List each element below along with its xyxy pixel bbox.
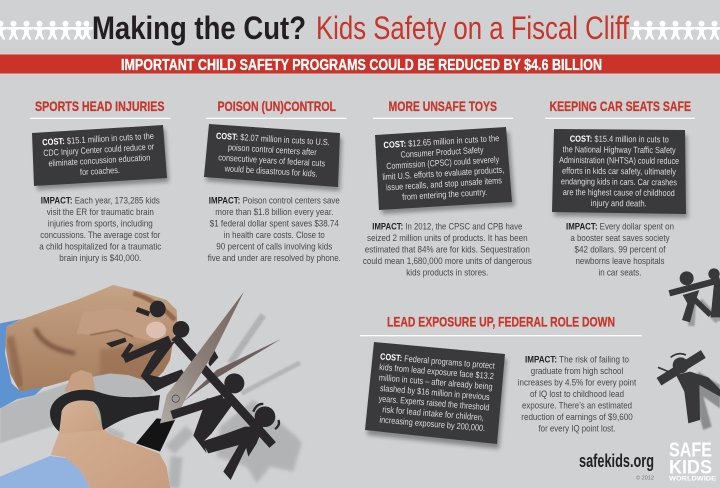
impact text: poison: $1 federal dollar spent saves $38.74 [210,218,339,228]
heading: lead exposure: LEAD EXPOSURE UP, FEDERAL ROLE DOWN [387,314,615,330]
heading: poison control: POISON (UN)CONTROL [218,98,336,114]
scissor upper handle [50,390,160,432]
cost card: lead: kids from lead exposure face $13.2 [379,362,494,381]
impact text: lead: graduate from high school [531,366,623,376]
impact text: toys: seized 2 million units of products. It has been [367,233,528,243]
paper chain left [0,21,93,40]
cost card: lead: increasing exposure by 200,000. [379,415,486,433]
cost card: poison [204,124,342,191]
blade lower [183,339,281,402]
title [92,10,629,46]
cost card: toys: limit U.S. efforts to evaluate products, [382,165,505,182]
impact text: poison: IMPACT: Poison control centers save [209,196,340,206]
impact text: car seats: in car seats. [598,268,642,278]
upper sleeve [0,319,46,408]
panel: sports head injuries [30,98,170,263]
cost card: toys: Commission (CPSC) could severely [386,154,500,171]
upper hand [5,285,177,392]
blade upper [160,292,244,423]
cost card: car seats: efforts in kids car safety, ultimately [562,166,677,177]
panel: unsafe toys [363,98,532,278]
impact text: sports: brain injury is $40,000. [59,253,141,263]
paper doll top right [669,268,720,326]
cost card: poison: poison control centers after [228,142,317,157]
lower hand [51,403,170,488]
impact text: sports: injuries from sports, including [48,218,153,228]
impact text: sports: a child hospitalized for a traumatic [39,242,162,252]
lower thumb tip [64,370,96,392]
cost card: sports: COST: $15.1 million in cuts to the [42,131,154,147]
thumb [77,308,167,342]
cost card: toys [375,127,515,214]
finger shading [100,340,173,380]
cost card: lead: COST: Federal programs to protect [380,351,496,371]
impact text: lead: of IQ lost to childhood lead [530,389,624,399]
paper chain [106,301,279,480]
handle ring insert [95,407,111,427]
impact text: toys: kids products in stores. [406,268,488,278]
cost card: sports [32,125,169,190]
impact text: poison: more than $1.8 billion every year. [215,207,333,217]
impact text: poison [208,196,341,263]
impact text: lead [518,354,637,434]
cost card: car seats: COST: $15.4 million in cuts to [570,134,669,144]
paper arm over blade [172,398,223,415]
cost card: car seats [552,129,688,218]
title: Kids Safety on a Fiscal Cliff [316,10,629,46]
impact text: toys [363,222,532,278]
cost card: poison: consecutive years of federal cuts [218,152,326,168]
cost card: car seats: the National Highway Traffic Safety [563,144,676,155]
impact text: lead: exposure. There’s an estimated [522,400,632,410]
paper doll lower right [658,354,720,430]
impact text: poison: five and under are resolved by phone. [208,253,341,263]
impact text: lead: increases by 4.5% for every point [518,378,637,388]
logo: safe kids worldwide: WORLDWIDE [669,476,716,482]
logo: safe kids worldwide [669,440,716,482]
impact text: poison: 90 percent of calls involving kids [216,242,333,252]
copyright: © 2012 [636,474,654,482]
impact text: sports: visit the ER for traumatic brain [47,207,154,217]
impact text: toys: estimated that 84% are for kids. Sequestration [365,244,530,254]
impact text: car seats: newborns leave hospitals [576,256,665,266]
heading: unsafe toys: MORE UNSAFE TOYS [388,98,497,114]
impact text: poison: in health care costs. Close to [224,230,325,240]
pivot screw [172,395,179,402]
cost card: lead [365,342,507,449]
impact text: car seats: a booster seat saves society [570,233,670,243]
impact text: car seats: $42 dollars. 99 percent of [574,244,666,254]
scissor lower handle [136,418,175,452]
cost card: car seats: Administration (NHTSA) could reduce [559,155,679,166]
impact text: sports: IMPACT: Each year, 173,285 kids [41,196,160,206]
cost card: car seats: injury and death. [591,198,647,208]
cost card: toys: from entering the country. [402,187,487,202]
shadows [0,315,302,488]
impact text: sports: concussions. The average cost for [40,230,160,240]
impact text: lead: reduction of earnings of $9,600 [521,412,633,422]
impact text: lead: IMPACT: The risk of failing to [525,354,629,364]
cost card: lead: risk for lead intake for children, [382,404,484,423]
impact text: sports [39,196,162,263]
title: Making the Cut? [92,10,306,46]
panel: lead exposure [360,314,642,449]
cost card: sports: CDC Injury Center could reduce or [43,141,154,158]
cost card: poison: COST: $2.07 million in cuts to U.S. [216,131,330,147]
cost card: lead: slashed by $16 million in previous [380,383,491,402]
panel: poison control [204,98,346,263]
impact text: lead: for every IQ point lost. [538,424,616,434]
panel: car seats [545,98,695,278]
cost card: toys: issue recalls, and stop unsafe items [386,175,503,192]
cost card: sports: for coaches. [80,165,120,177]
lower thumb through handle [60,401,103,433]
impact text: car seats: IMPACT: Every dollar spent on [566,222,674,232]
website: safekids.org [579,451,654,471]
cost card: car seats: endanging kids in cars. Car crashes [561,176,677,187]
impact text: car seats [566,222,674,278]
heading: sports head injuries: SPORTS HEAD INJURIES [35,98,164,114]
cost card: sports: eliminate concussion education [48,152,151,168]
thumb nail [146,322,166,338]
impact text: toys: could mean 1,680,000 more units of dangerous [363,256,532,266]
logo: safe kids worldwide: KIDS [669,456,712,478]
cost card: lead: million in cuts – after already being [379,372,493,392]
cost card: toys: COST: $12.65 million in cuts to the [383,133,500,150]
impact text: toys: IMPACT: In 2012, the CPSC and CPB have [372,222,522,232]
cost card: lead: years. Experts raised the threshold [378,393,490,412]
cost card: car seats: are the highest cause of childhood [563,187,675,198]
photo: hands cutting a paper doll chain with scissors [0,285,302,488]
lower sleeve [0,456,91,488]
cost card: toys: Consumer Product Safety [400,145,484,160]
cost card: poison: would be disastrous for kids. [224,163,318,179]
red banner: IMPORTANT CHILD SAFETY PROGRAMS COULD BE REDUCED BY $4.6 BILLION [121,57,602,74]
paper chain right [630,21,720,40]
